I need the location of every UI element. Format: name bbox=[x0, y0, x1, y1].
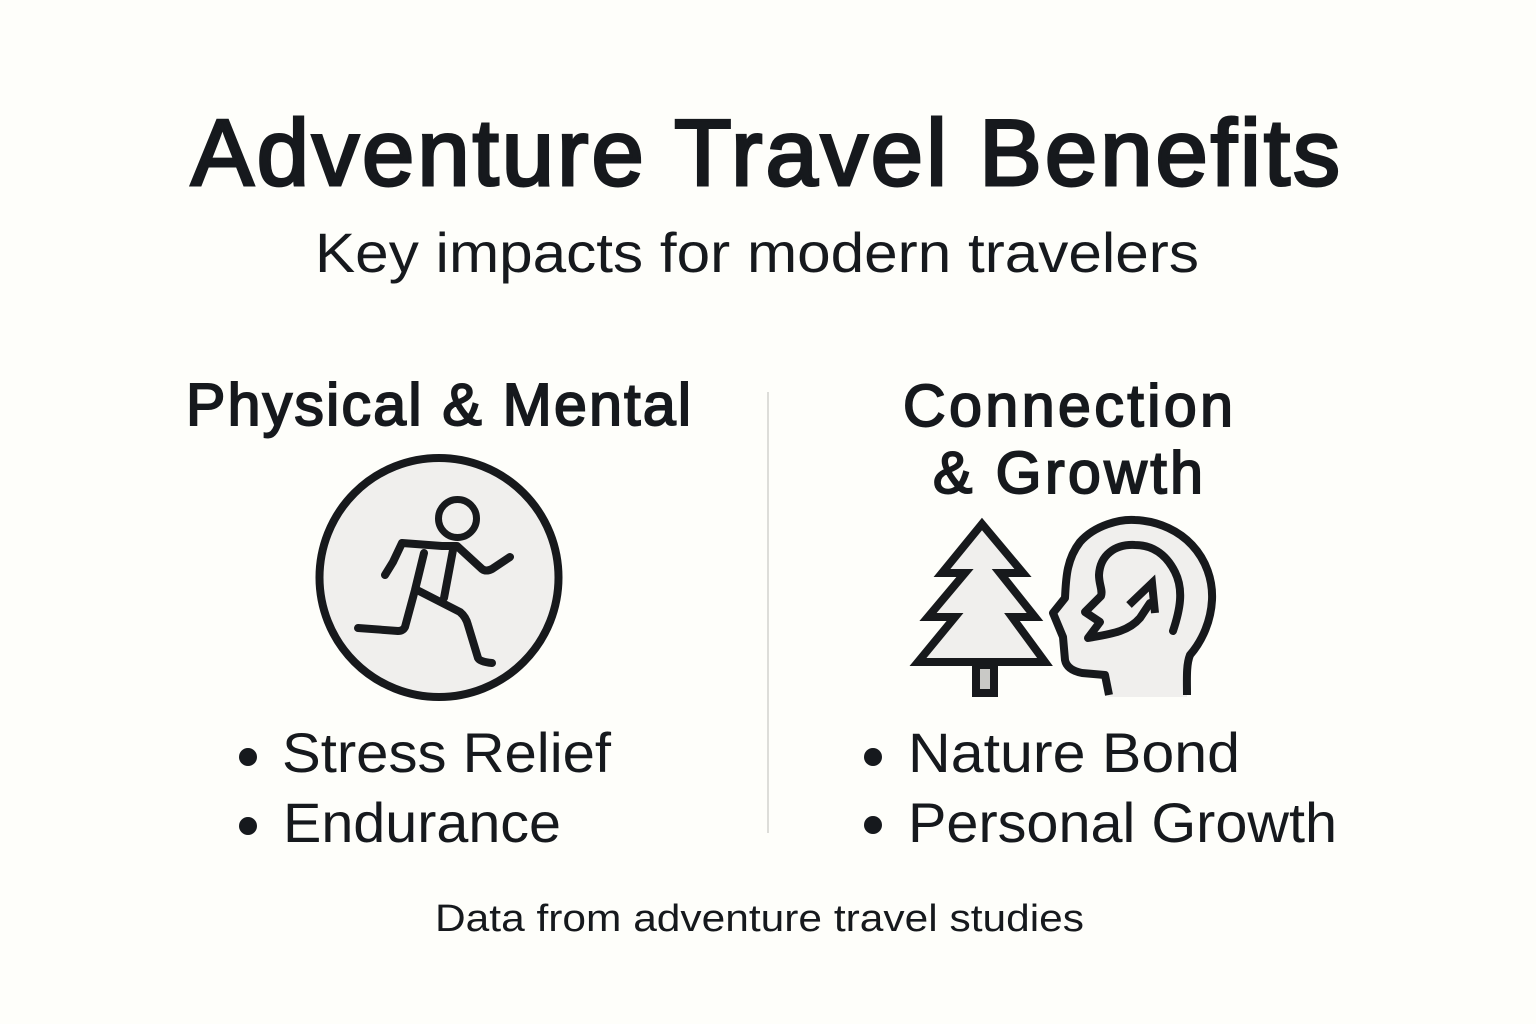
list: physical and mental benefits: Endurance bbox=[283, 791, 561, 854]
panel: connection and growth bbox=[864, 373, 1337, 854]
icon: pine tree bbox=[918, 524, 1045, 693]
icon: runner in circle bbox=[320, 458, 558, 697]
title: Adventure Travel Benefits bbox=[191, 100, 1340, 205]
heading: connection and growth bbox=[903, 373, 1233, 506]
list: physical and mental benefits bbox=[239, 721, 611, 854]
subtitle: Key impacts for modern travelers bbox=[315, 221, 1199, 284]
list: connection and growth benefits bbox=[864, 721, 1337, 854]
list: physical and mental benefits: Stress Relief bbox=[282, 721, 611, 784]
footer source note: Data from adventure travel studies bbox=[435, 898, 1084, 940]
heading: connection and growth: Connection bbox=[903, 373, 1233, 439]
icon: head with growth arrow bbox=[1053, 520, 1212, 697]
panel: physical and mental bbox=[186, 372, 691, 854]
list: connection and growth benefits: Personal Growth bbox=[908, 791, 1337, 854]
heading: connection and growth: & Growth bbox=[933, 440, 1203, 506]
list: connection and growth benefits: Nature Bond bbox=[908, 721, 1240, 784]
heading: physical and mental: Physical & Mental bbox=[186, 372, 691, 438]
